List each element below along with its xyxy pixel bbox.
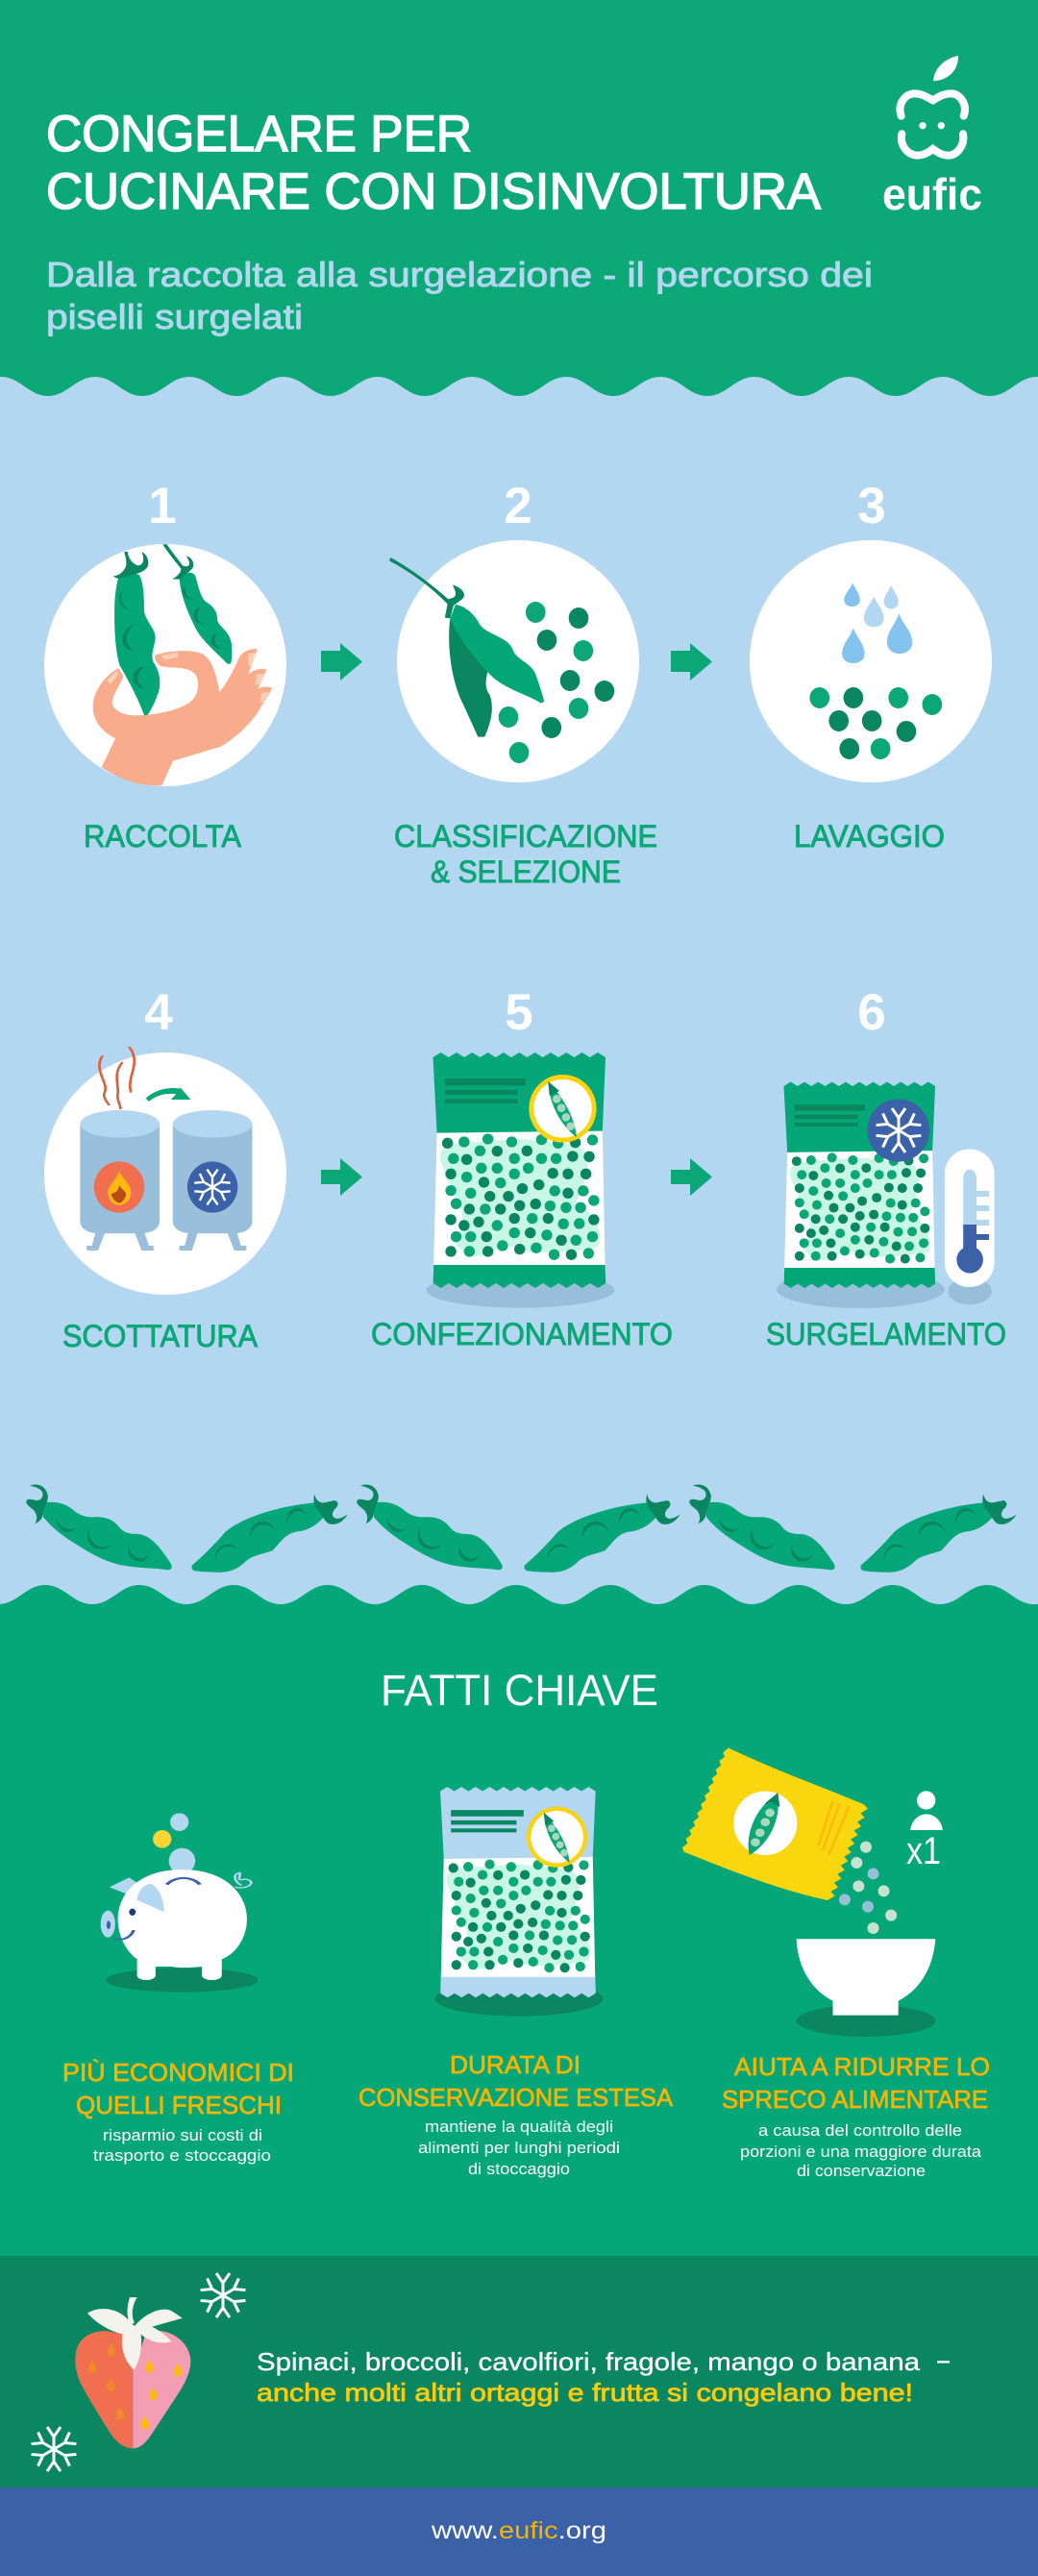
fact 3: packet and bowl: a causa del controllo delle [758,2121,962,2140]
footer url: www. eufic .org [431,2517,606,2544]
step 3: lavaggio [750,478,992,854]
bottom band: other frozen foods [0,2256,1038,2488]
step 6: surgelamento: 6 [857,984,886,1041]
arrow: step 4 to 5 [321,1158,362,1196]
fact 1: piggy bank: trasporto e stoccaggio [93,2146,271,2165]
step 5: confezionamento: 5 [505,984,533,1041]
decorative row of pea pods [26,1485,1017,1573]
fact 3: packet and bowl: SPRECO ALIMENTARE [722,2085,988,2114]
step 5: confezionamento [371,984,673,1351]
step 2: classificazione e selezione: CLASSIFICAZIONE [394,819,657,854]
fact 2: frozen pack [358,1787,674,2178]
callout text: Spinaci, broccoli, cavolfiori, fragole, mango o banana [257,2347,921,2376]
header panel with wave edge [0,0,1038,396]
step 1: raccolta [44,478,286,854]
step 3: lavaggio: LAVAGGIO [794,819,945,854]
step 6: surgelamento: SURGELAMENTO [766,1317,1006,1351]
key facts panel with wave edge [0,1585,1038,2256]
fact 1: piggy bank: PIÙ ECONOMICI DI [62,2058,294,2087]
step 3: lavaggio: 3 [857,478,886,534]
fact 2: frozen pack: di stoccaggio [468,2160,570,2178]
title: CUCINARE CON DISINVOLTURA [46,163,822,220]
step 1: raccolta: 1 [148,478,177,534]
step 2: classificazione e selezione [389,478,657,889]
fact 3: packet and bowl: porzioni e una maggiore durata [740,2143,982,2161]
step 5: confezionamento: CONFEZIONAMENTO [371,1317,673,1351]
subtitle: piselli surgelati [46,297,303,336]
heading: fatti chiave: FATTI CHIAVE [381,1666,658,1715]
fact 3: packet and bowl [682,1747,990,2180]
fact 3: packet and bowl: di conservazione [797,2162,926,2180]
step 4: scottatura: SCOTTATURA [62,1319,259,1353]
step 4: scottatura: 4 [144,984,173,1041]
title [46,106,822,220]
subtitle: Dalla raccolta alla surgelazione - il percorso dei [46,255,873,294]
fact 1: piggy bank: QUELLI FRESCHI [76,2091,282,2119]
step 4: scottatura [44,984,286,1353]
icon: snowflake top [201,2273,245,2317]
fact 2: frozen pack: CONSERVAZIONE ESTESA [358,2083,674,2112]
fact 2: frozen pack: DURATA DI [450,2050,581,2079]
logo: eufic [882,56,982,219]
logo: eufic: eufic [882,169,982,219]
step 1: raccolta: RACCOLTA [84,819,242,854]
subtitle [46,255,873,336]
fact 3: packet and bowl: x1 [906,1830,941,1872]
arrow: step 5 to 6 [671,1158,712,1196]
icon: snowflake bottom [32,2427,76,2471]
fact 1: piggy bank: risparmio sui costi di [103,2126,262,2144]
footer band [0,2488,1038,2576]
strawberry illustration [75,2297,190,2448]
step 6: surgelamento [766,984,1006,1351]
fact 3: packet and bowl: AIUTA A RIDURRE LO [734,2052,990,2081]
step 2: classificazione e selezione: & SELEZIONE [431,855,621,889]
callout text [257,2347,950,2407]
callout text: anche molti altri ortaggi e frutta si congelano bene! [257,2378,913,2407]
step 2: classificazione e selezione: 2 [504,478,532,534]
fact 2: frozen pack: alimenti per lunghi periodi [418,2139,620,2157]
fact 2: frozen pack: mantiene la qualità degli [425,2118,613,2136]
arrow: step 2 to 3 [671,643,712,681]
title: CONGELARE PER [46,106,472,162]
fact 1: piggy bank [62,1813,294,2165]
arrow: step 1 to 2 [321,643,362,681]
